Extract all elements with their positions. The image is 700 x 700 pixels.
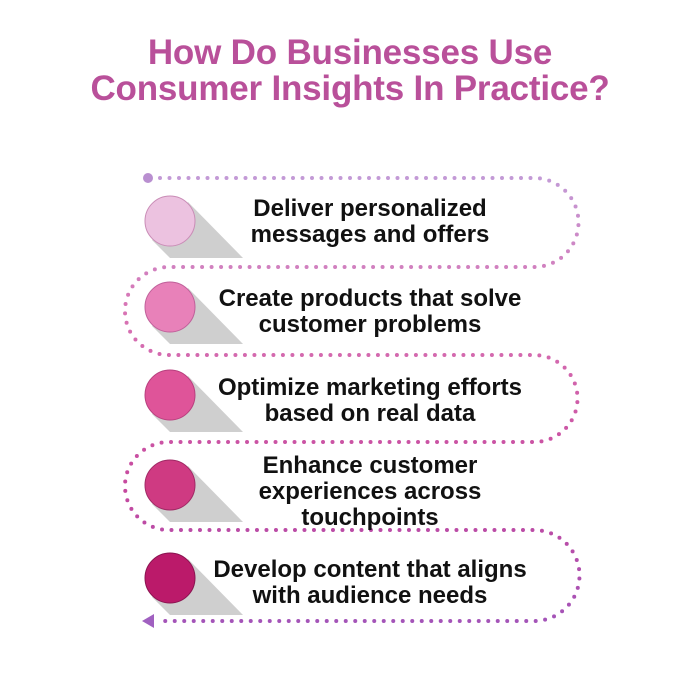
label 1 [251, 195, 489, 248]
label 4: Enhance customer [263, 452, 477, 479]
step 2 marker [145, 282, 243, 344]
label 5: with audience needs [253, 582, 487, 609]
label 4: experiences across [259, 478, 481, 505]
label 4: touchpoints [301, 504, 439, 531]
label 1: Deliver personalized [253, 195, 487, 222]
title: Consumer Insights In Practice? [90, 69, 610, 108]
step 5 marker [145, 553, 243, 615]
step 4 marker [145, 460, 243, 522]
label 1: messages and offers [251, 221, 489, 248]
label 2: customer problems [259, 311, 481, 338]
end arrow [142, 614, 154, 628]
label 5 [213, 556, 527, 609]
label 3: Optimize marketing efforts [218, 374, 522, 401]
start dot [143, 173, 153, 183]
dotted path [125, 178, 580, 621]
title [90, 33, 610, 108]
step 3 marker [145, 370, 243, 432]
label 3 [218, 374, 522, 427]
label 2: Create products that solve [219, 285, 521, 312]
label 5: Develop content that aligns [213, 556, 527, 583]
title: How Do Businesses Use [148, 33, 552, 72]
label 3: based on real data [265, 400, 475, 427]
step 1 marker [145, 196, 243, 258]
label 4 [259, 452, 481, 531]
label 2 [219, 285, 521, 338]
